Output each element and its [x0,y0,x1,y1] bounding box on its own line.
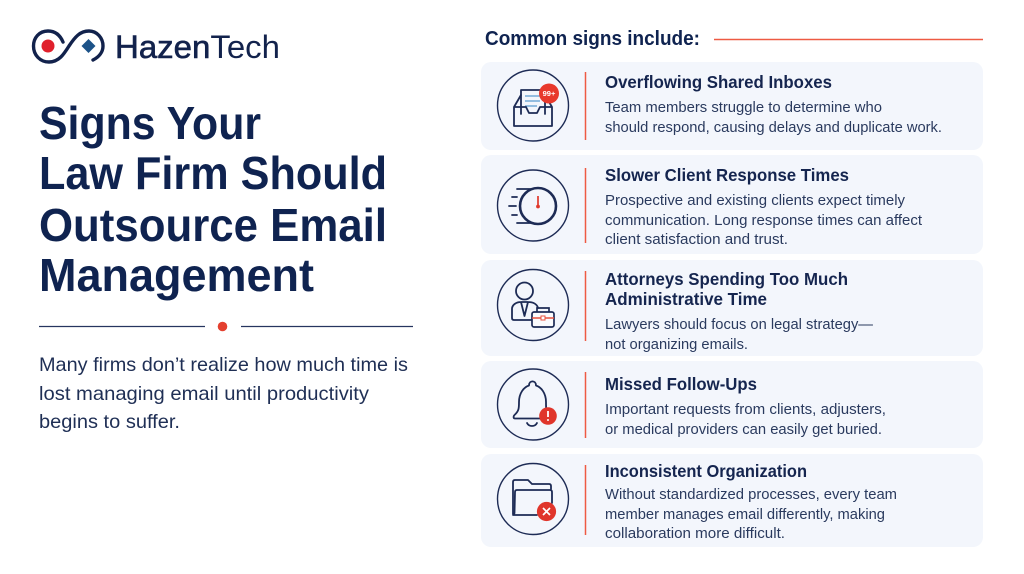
logo wordmark: HazenTech [115,29,280,65]
title: Outsource Email [39,199,387,251]
title: Management [39,249,314,301]
icon: attorney with briefcase [512,282,554,327]
panel: inconsistent organization: Without standardized processes, every team [605,487,897,503]
panel: overflowing shared inboxes: Team members struggle to determine who [605,100,882,116]
panel: attorneys spending too much administrative time: Lawyers should focus on legal strategy— [605,317,873,333]
panel: slower client response times: communication. Long response times can affect [605,213,922,229]
panel: inconsistent organization: collaboration more difficult. [605,526,785,542]
title: Law Firm Should [39,147,387,199]
panel: missed follow-ups: Important requests from clients, adjusters, [605,402,886,418]
panel: attorneys spending too much administrative time: Attorneys Spending Too Much [605,269,848,289]
panel: missed follow-ups: or medical providers can easily get buried. [605,422,882,438]
intro paragraph: lost managing email until productivity [39,383,369,405]
panel: missed follow-ups [481,361,983,448]
panel: overflowing shared inboxes: Overflowing Shared Inboxes [605,72,832,92]
panel: attorneys spending too much administrative time: not organizing emails. [605,337,748,353]
section heading: Common signs include: [485,28,700,50]
logo [34,29,280,65]
panel: slower client response times [481,155,983,254]
panel: slower client response times: Prospective and existing clients expect timely [605,193,906,209]
icon: inbox [514,84,559,126]
intro paragraph: Many firms don’t realize how much time is [39,354,408,376]
icon: stopwatch [509,188,556,224]
logo mark [34,31,103,62]
panel: inconsistent organization: member manages email differently, making [605,507,885,523]
icon: folder with x [513,480,556,521]
icon: bell with alert [514,381,557,426]
title: Signs Your [39,97,261,149]
panel: missed follow-ups: Missed Follow-Ups [605,374,757,394]
panel: slower client response times: Slower Client Response Times [605,165,849,185]
title divider [39,322,413,331]
panel: attorneys spending too much administrative time: Administrative Time [605,289,767,309]
panel: attorneys spending too much administrative time [481,260,983,356]
panel: overflowing shared inboxes: should respond, causing delays and duplicate work. [605,120,942,136]
panel: overflowing shared inboxes [481,62,983,150]
panel: inconsistent organization [481,454,983,547]
panel: inconsistent organization: Inconsistent Organization [605,461,807,481]
title [39,97,387,301]
icon: inbox: 99+ [543,89,556,98]
intro paragraph [39,354,408,433]
panel: slower client response times: client satisfaction and trust. [605,232,788,248]
intro paragraph: begins to suffer. [39,411,180,433]
